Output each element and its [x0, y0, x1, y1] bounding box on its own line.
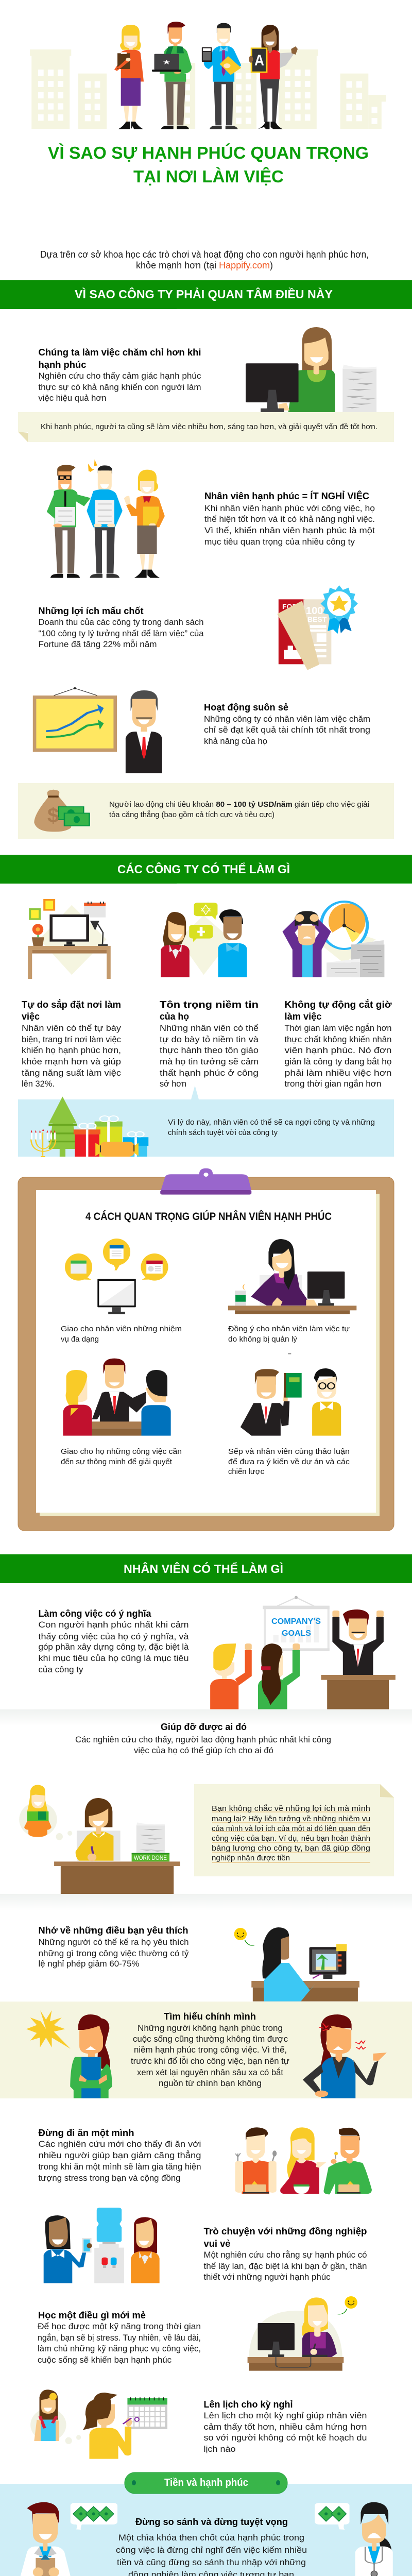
- column: respect their beliefs: của họ: [160, 1011, 189, 1022]
- text block: learn something new: [38, 2310, 201, 2365]
- text block: chat with cheerful colleagues: thiết với những người hạnh phúc: [204, 2272, 331, 2282]
- title: TẠI NƠI LÀM VIỆC: [133, 167, 284, 186]
- illustration: doctors comparing money: [20, 2502, 393, 2576]
- section banner: why companies should care: [0, 280, 412, 309]
- icon: personalised desk: [28, 899, 111, 979]
- text: know yourself: xem xét lại nguyên nhân sâu xa có bắt: [137, 2067, 283, 2077]
- column: freedom to arrange workspace: tăng năng suất làm việc: [22, 1068, 122, 1078]
- column: do not cut working hours: [284, 999, 392, 1089]
- callout: how your work helps others: Bạn không chắc về những lợi ích mà mình: [212, 1804, 370, 1813]
- text block: remember what you love: [38, 1925, 189, 1969]
- column: freedom to arrange workspace: Nhân viên có thể tự bày: [22, 1023, 122, 1033]
- text block: work harder when happy: Chúng ta làm việc chăm chỉ hơn khi: [38, 347, 201, 358]
- icon: company goals presentation: [210, 1596, 396, 1709]
- fade divider: [0, 1709, 412, 1726]
- column: respect their beliefs: mà họ tin tưởng sẽ cảm: [160, 1057, 259, 1066]
- text: do not compare: Một chìa khóa then chốt của hạnh phúc trong: [118, 2533, 304, 2543]
- section banner: what employees can do: NHÂN VIÊN CÓ THỂ LÀM GÌ: [124, 1562, 283, 1575]
- text: know yourself: cuộc sống cũng thường không tìm được: [133, 2034, 288, 2044]
- woman with letter board: [249, 25, 298, 129]
- text block: remember what you love: Những người có thể kể ra họ yêu thích: [38, 1937, 188, 1947]
- way 2: autonomy: do không bị quản lý: [228, 1335, 298, 1344]
- column: respect their beliefs: sở hơn: [160, 1079, 186, 1089]
- pill heading: money and happiness: Tiền và hạnh phúc: [164, 2477, 248, 2488]
- callout: how your work helps others: của mình và lợi ích của một ai đó liên quan đến: [212, 1824, 370, 1833]
- column: do not cut working hours: viên hạnh phúc. Nó đơn: [284, 1045, 391, 1055]
- text: do not compare: tiền và cũng đừng so sánh thu nhập với những: [117, 2557, 306, 2567]
- column: respect their beliefs: tự do bày tỏ niềm tin và: [160, 1035, 259, 1044]
- text block: do not eat alone: Đừng đi ăn một mình: [38, 2127, 134, 2138]
- way 4: shared discussion: chiến lược: [228, 1467, 264, 1476]
- icon: Fortune 100 best magazine with award ribbon: [277, 585, 358, 670]
- section banner: what companies can do: [0, 855, 412, 884]
- text block: meaningful work: Làm công việc có ý nghĩa: [38, 1608, 151, 1619]
- column: do not cut working hours: phải làm nhiều việc hơn: [284, 1068, 391, 1078]
- header illustration: office workers in front of buildings: [30, 22, 386, 129]
- text block: fewer resignations: thể hiện tốt hơn và ít có khả năng nghỉ việc.: [204, 514, 375, 524]
- text block: fewer resignations: Khi nhân viên hạnh phúc với công việc, họ: [204, 503, 375, 513]
- way 4: shared discussion: [228, 1353, 350, 1476]
- text: do not compare: Đừng so sánh và đừng tuyệt vọng: [135, 2516, 288, 2527]
- illustration: two unhappy women: [26, 2010, 387, 2098]
- text: do not compare: công việc là đừng chỉ nghĩ đến việc kiếm nhiều: [116, 2545, 307, 2555]
- icon: woman at desk thinking of a colleague receiving pay: [19, 1785, 180, 1894]
- callout: how your work helps others: mang lại? Hãy liên tưởng về những nhiệm vụ: [212, 1815, 370, 1823]
- way 1: varied tasks: Giao cho nhân viên những nhiệm: [61, 1325, 182, 1333]
- way 1: varied tasks: [61, 1239, 182, 1344]
- callout: employees praise the company: chính sách tuyệt vời của công ty: [168, 1128, 278, 1137]
- text block: meaningful work: của công ty: [38, 1665, 83, 1674]
- text block: work harder when happy: Nghiên cứu cho thấy cảm giác hạnh phúc: [38, 371, 201, 381]
- icon: woman learning at computer: [248, 2296, 357, 2371]
- text block: key benefits: Doanh thu của các công ty trong danh sách: [38, 617, 204, 627]
- text block: key benefits: Những lợi ích mấu chốt: [38, 605, 143, 616]
- way 4: shared discussion: Sếp và nhân viên cùng thảo luận: [228, 1447, 350, 1456]
- icon: holiday tree, menorah and gifts: [31, 1096, 148, 1157]
- panel: know yourself: [0, 2002, 412, 2098]
- icon: woman at desk thinking of a colleague receiving pay: WORK DONE: [134, 1854, 167, 1861]
- column: do not cut working hours: trong thời gian ngắn hơn: [284, 1079, 381, 1089]
- text block: fewer resignations: mục tiêu quan trọng của nhiều công ty: [204, 537, 355, 547]
- text block: schedule a vacation: Lên lịch cho một kỳ nghỉ giúp nhân viên: [204, 2411, 367, 2420]
- column: freedom to arrange workspace: biện, trang trí nơi làm việc: [22, 1035, 121, 1044]
- icon: company goals presentation: COMPANY'S: [271, 1617, 321, 1626]
- icon: three colleagues holding documents: [47, 460, 165, 578]
- icon: three people eating together: [235, 2127, 372, 2194]
- way 4: shared discussion: để đưa ra ý kiến về dự án và các: [228, 1458, 350, 1466]
- woman with folder: [124, 470, 165, 578]
- callout: how your work helps others: bảng lương cho công ty, bạn đã giúp đồng: [212, 1844, 370, 1853]
- text block: remember what you love: những gì trong công việc thường có tỷ: [38, 1948, 189, 1958]
- text: know yourself: Những người không hạnh phúc trong: [138, 2023, 283, 2033]
- clip: [160, 1168, 251, 1195]
- section banner: what employees can do: [0, 1554, 412, 1583]
- text block: chat with cheerful colleagues: [204, 2226, 367, 2282]
- text block: fewer resignations: [204, 490, 375, 547]
- text block: meaningful work: góp phần xây dựng công ty, đặc biệt là: [38, 1642, 189, 1652]
- intro text: Dựa trên cơ sở khoa học các trò chơi và hoạt động cho con người hạnh phúc hơn,: [40, 249, 369, 260]
- column: respect their beliefs: [160, 999, 259, 1089]
- text block: work harder when happy: việc hiệu quả hơn: [38, 393, 106, 403]
- text block: key benefits: Fortune đã tăng 22% mỗi năm: [38, 639, 157, 649]
- text block: learn something new: làm chủ những kỹ năng phục vụ công việc,: [38, 2344, 201, 2353]
- text block: smooth operations: khả năng của họ: [204, 736, 267, 746]
- woman with clipboard: [114, 25, 144, 129]
- icon: money bag and bills: $: [47, 804, 59, 827]
- way 2: autonomy: Đồng ý cho nhân viên làm việc tự: [228, 1325, 350, 1333]
- text: know yourself: Tìm hiểu chính mình: [164, 2011, 256, 2022]
- clipboard heading: 4 CÁCH QUAN TRỌNG GIÚP NHÂN VIÊN HẠNH PHÚC: [85, 1210, 332, 1223]
- text block: do not eat alone: trong khi ăn một mình sẽ làm gia tăng hiện: [38, 2162, 201, 2172]
- icon: company goals presentation: GOALS: [282, 1629, 311, 1638]
- icon: Fortune 100 best magazine with award ribbon: FOR: [282, 602, 298, 611]
- text block: smooth operations: chỉ sẽ đạt kết quả tài chính tốt nhất trong: [204, 725, 370, 735]
- icon: stressed man with clock and papers: [282, 902, 384, 977]
- column: freedom to arrange workspace: khỏe mạnh hơn và giúp: [22, 1057, 121, 1066]
- way 1: varied tasks: vụ đa dạng: [61, 1335, 99, 1344]
- text block: remember what you love: Nhớ về những điều bạn yêu thích: [38, 1925, 188, 1936]
- title: VÌ SAO SỰ HẠNH PHÚC QUAN TRỌNG: [48, 143, 369, 162]
- text block: fewer resignations: Nhân viên hạnh phúc = ÍT NGHỈ VIỆC: [204, 490, 369, 501]
- text block: key benefits: [38, 605, 204, 649]
- title: [48, 143, 369, 186]
- text block: learn something new: cuộc sống sẽ khiến bạn hạnh phúc: [38, 2355, 171, 2365]
- column: freedom to arrange workspace: Tự do sắp đặt nơi làm: [22, 999, 121, 1010]
- callout: how your work helps others: nghiệp nhận được tiền: [212, 1854, 290, 1862]
- column: respect their beliefs: thất hạnh phúc ở công: [160, 1068, 259, 1078]
- way 3: intellectually challenging work: đến sự thông minh để giải quyết: [61, 1458, 173, 1466]
- panel: money and happiness: [0, 2472, 412, 2576]
- column: freedom to arrange workspace: lên 32%.: [22, 1079, 55, 1089]
- text block: do not eat alone: nhiều người giúp bạn giảm căng thẳng: [38, 2150, 201, 2160]
- section banner: why companies should care: VÌ SAO CÔNG TY PHẢI QUAN TÂM ĐIỀU NÀY: [75, 286, 333, 301]
- callout: stress spending: Người lao động chi tiêu khoản 80 – 100 tỷ USD/năm gián tiếp cho việc giải: [109, 800, 369, 809]
- column: respect their beliefs: Tôn trọng niềm tin: [160, 999, 259, 1010]
- icon: designer at computer with smiley: [234, 1927, 359, 2002]
- text block: schedule a vacation: [204, 2399, 367, 2454]
- way 3: intellectually challenging work: [61, 1359, 182, 1466]
- man with laptop: [152, 22, 192, 129]
- text block: do not eat alone: Các nghiên cứu mới cho thấy đi ăn với: [38, 2139, 201, 2149]
- column: freedom to arrange workspace: việc: [22, 1011, 40, 1022]
- text block: learn something new: Học một điều gì mới mẻ: [38, 2310, 146, 2320]
- text block: work harder when happy: [38, 347, 201, 403]
- icon: money bag and bills: [34, 790, 89, 832]
- icon: woman at computer with paper stack: [246, 327, 376, 412]
- column: do not cut working hours: thực chất không khiến nhân: [284, 1035, 391, 1044]
- icon: Fortune 100 best magazine with award ribbon: BEST: [307, 615, 327, 623]
- text block: learn something new: Để học được một kỹ năng trong thời gian: [38, 2321, 201, 2331]
- text block: chat with cheerful colleagues: thể lây lan, đặc biệt là khi bạn ở gần, thân: [204, 2261, 367, 2271]
- column: freedom to arrange workspace: khiến họ hạnh phúc hơn,: [22, 1045, 121, 1055]
- text: know yourself: niềm hạnh phúc trong công việc. Vì thế,: [134, 2045, 287, 2055]
- callout: happy people work more: Khi hạnh phúc, người ta cũng sẽ làm việc nhiều hơn, sáng tạo hơn, và giải quyết vấn đề tốt hơn.: [41, 422, 377, 431]
- text block: work harder when happy: thực sự có khả năng khiến con người làm: [38, 382, 201, 392]
- icon: colleagues at the water cooler: [44, 2208, 160, 2283]
- text block: meaningful work: [38, 1608, 189, 1674]
- text block: smooth operations: Hoạt động suôn sẻ: [204, 702, 288, 713]
- column: do not cut working hours: giản là công ty đang bắt họ: [284, 1057, 391, 1066]
- text block: helping someone: Các nghiên cứu cho thấy, người lao động hạnh phúc nhất khi công: [75, 1735, 331, 1744]
- way 2: autonomy: [228, 1239, 356, 1344]
- text block: chat with cheerful colleagues: Một nghiên cứu cho rằng sự hạnh phúc có: [204, 2250, 367, 2260]
- column: do not cut working hours: Thời gian làm việc ngắn hơn: [284, 1023, 391, 1033]
- text block: do not eat alone: [38, 2127, 201, 2183]
- text block: helping someone: [75, 1721, 331, 1755]
- callout: stress spending: [18, 783, 394, 839]
- man with glasses: [47, 465, 91, 578]
- icon: growth chart and manager: [33, 687, 162, 773]
- callout: happy people work more: [18, 412, 394, 442]
- text block: meaningful work: thấy công việc của họ có ý nghĩa, và: [38, 1632, 189, 1641]
- column: do not cut working hours: Không tự động cắt giờ: [284, 999, 392, 1010]
- letter on the board: A: [254, 52, 264, 69]
- column: respect their beliefs: thực hành theo tôn giáo: [160, 1045, 259, 1055]
- text: do not compare: [116, 2516, 307, 2576]
- pill heading: money and happiness: [125, 2472, 287, 2494]
- text block: key benefits: “100 công ty lý tưởng nhất để làm việc” của: [38, 629, 204, 638]
- way 3: intellectually challenging work: Giao cho họ những công việc cần: [61, 1447, 182, 1456]
- intro text: khỏe mạnh hơn (tại Happify.com): [136, 260, 273, 270]
- callout: employees praise the company: Vì lý do này, nhân viên có thể sẽ ca ngợi công ty và những: [168, 1118, 375, 1127]
- man in blue: [87, 460, 123, 578]
- icon: colleagues sharing beliefs: [161, 903, 247, 977]
- text block: learn something new: ngắn, bạn sẽ bị stress. Tuy nhiên, về lâu dài,: [38, 2333, 201, 2343]
- text block: schedule a vacation: so với người không có một kế hoạch du: [204, 2433, 367, 2443]
- icon: woman planning a vacation: [30, 2389, 167, 2459]
- text block: helping someone: việc của họ có thể giúp ích cho ai đó: [134, 1745, 273, 1755]
- text block: do not eat alone: tượng stress trong bạn và cộng đồng: [38, 2173, 180, 2183]
- column: do not cut working hours: làm việc: [284, 1011, 321, 1022]
- text block: chat with cheerful colleagues: Trò chuyện với những đồng nghiệp: [204, 2226, 367, 2236]
- text: know yourself: [131, 2011, 289, 2088]
- man with calculator: [202, 23, 241, 129]
- callout: employees praise the company: [18, 1086, 394, 1157]
- text block: helping someone: Giúp đỡ được ai đó: [161, 1721, 247, 1732]
- text block: schedule a vacation: lịch nào: [204, 2444, 236, 2454]
- fade divider: [0, 1894, 412, 1910]
- text block: smooth operations: [204, 702, 370, 746]
- text block: meaningful work: Con người hạnh phúc nhất khi cảm: [38, 1620, 188, 1630]
- panel: clipboard with four ways: [18, 1168, 394, 1531]
- column: freedom to arrange workspace: [22, 999, 122, 1089]
- text block: chat with cheerful colleagues: vui vẻ: [204, 2238, 231, 2249]
- text block: remember what you love: lệ nghỉ phép giảm 60-75%: [38, 1959, 139, 1969]
- text block: fewer resignations: Vì thế, khiến nhân viên hạnh phúc là một: [204, 526, 375, 535]
- callout: how your work helps others: [194, 1784, 394, 1876]
- text block: schedule a vacation: Lên lịch cho kỳ nghỉ: [204, 2399, 293, 2410]
- section banner: what companies can do: CÁC CÔNG TY CÓ THỂ LÀM GÌ: [117, 862, 290, 876]
- text: know yourself: nguồn từ chính bạn không: [159, 2078, 262, 2088]
- text block: smooth operations: Những công ty có nhân viên làm việc chăm: [204, 714, 370, 724]
- text block: work harder when happy: hạnh phúc: [38, 359, 87, 370]
- column: respect their beliefs: Những nhân viên có thể: [160, 1023, 259, 1033]
- intro text: [40, 249, 369, 270]
- callout: stress spending: tỏa căng thẳng (bao gồm cả tích cực và tiêu cực): [109, 810, 274, 819]
- text block: schedule a vacation: cảm thấy tốt hơn, nhiều cảm hứng hơn: [204, 2422, 367, 2432]
- text: know yourself: trước khi đổ lỗi cho công việc, bạn nên tự: [131, 2056, 289, 2066]
- text block: meaningful work: khi mục tiêu của họ cũng là mục tiêu: [38, 1653, 188, 1663]
- callout: how your work helps others: công việc của bạn. Ví dụ, nếu bạn hoàn thành: [212, 1834, 370, 1843]
- icon: Fortune 100 best magazine with award ribbon: 100: [306, 605, 323, 617]
